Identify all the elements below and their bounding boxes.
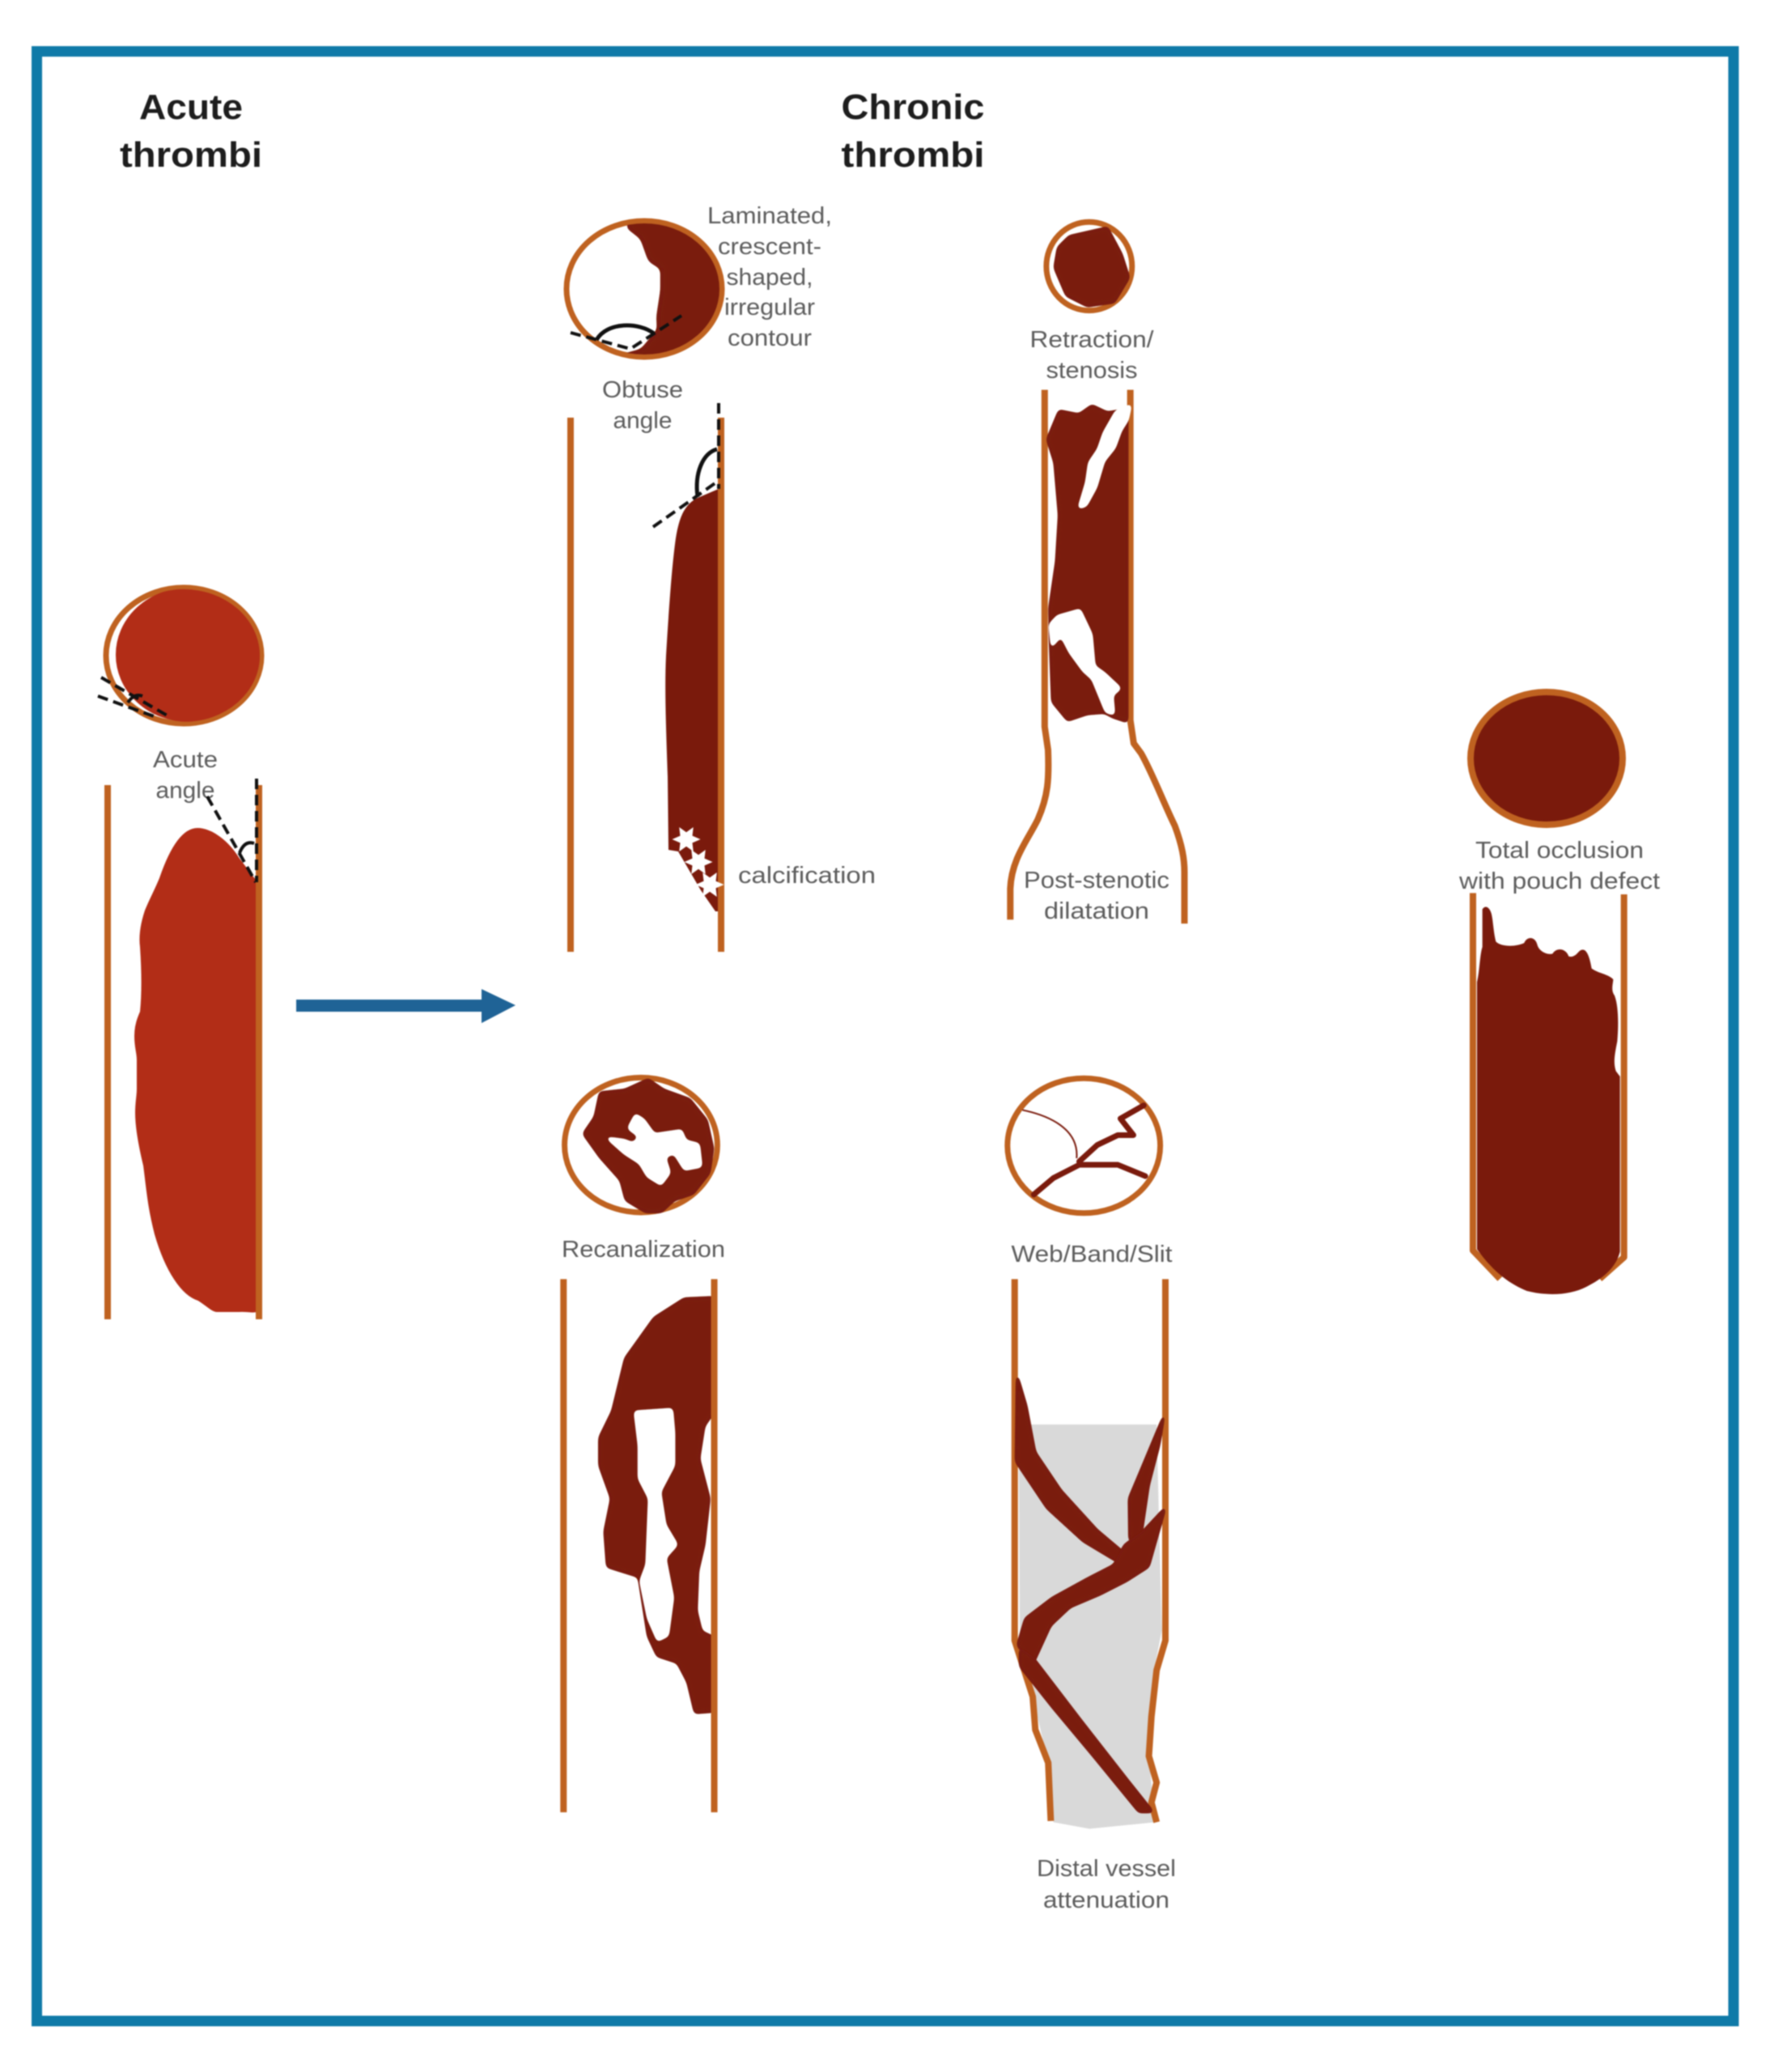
- retraction cross-section: [1046, 222, 1132, 311]
- label: total occlusion with pouch defect: [1458, 838, 1660, 894]
- label: obtuse angle: [602, 377, 683, 434]
- label: distal vessel attenuation: Distal vessel: [1037, 1856, 1176, 1882]
- occlusion cross-section: [1471, 692, 1623, 825]
- laminated cross-section: [563, 217, 725, 361]
- label: post-stenotic dilatation: dilatation: [1044, 898, 1149, 924]
- label: total occlusion with pouch defect: with pouch defect: [1458, 868, 1660, 894]
- panel: acute thrombus: [98, 588, 261, 1319]
- label: laminated crescent-shaped: Laminated,: [707, 203, 832, 229]
- panel: recanalization: [563, 1077, 717, 1812]
- heading: chronic thrombi: [842, 87, 984, 175]
- label: laminated crescent-shaped: [707, 203, 832, 351]
- heading: acute thrombi: thrombi: [120, 135, 262, 175]
- label: calcification: calcification: [738, 863, 876, 889]
- arrow: acute to chronic: [296, 989, 516, 1023]
- web cross-section: [1008, 1078, 1161, 1213]
- attenuated vessel with bands: [1015, 1279, 1165, 1829]
- panel: laminated crescent thrombus: [567, 203, 876, 952]
- occlusion vessel with pouch defect: [1473, 893, 1624, 1294]
- label: obtuse angle: angle: [613, 408, 672, 434]
- label: laminated crescent-shaped: shaped,: [727, 265, 813, 291]
- acute vessel longitudinal: [108, 779, 259, 1319]
- calcification stars: [672, 827, 724, 897]
- heading: acute thrombi: Acute: [139, 87, 243, 127]
- label: web/band/slit: Web/Band/Slit: [1012, 1242, 1172, 1267]
- label: acute angle: [153, 747, 218, 804]
- label: distal vessel attenuation: [1037, 1856, 1176, 1913]
- recanalization cross-section: [565, 1077, 717, 1212]
- heading: acute thrombi: [120, 87, 262, 175]
- panel: total occlusion: [1458, 692, 1660, 1294]
- label: acute angle: angle: [155, 778, 215, 804]
- label: retraction/stenosis: Retraction/: [1029, 327, 1155, 353]
- label: total occlusion with pouch defect: Total occlusion: [1475, 838, 1644, 864]
- label: laminated crescent-shaped: contour: [728, 325, 812, 351]
- label: post-stenotic dilatation: [1024, 868, 1169, 924]
- label: post-stenotic dilatation: Post-stenotic: [1024, 868, 1169, 894]
- label: distal vessel attenuation: attenuation: [1043, 1887, 1169, 1913]
- label: recanalization: Recanalization: [562, 1237, 725, 1263]
- label: acute angle: Acute: [153, 747, 218, 773]
- label: retraction/stenosis: [1029, 327, 1155, 384]
- heading: chronic thrombi: Chronic: [842, 87, 984, 127]
- heading: chronic thrombi: thrombi: [842, 135, 984, 175]
- label: laminated crescent-shaped: irregular: [724, 295, 815, 321]
- panel: web band slit: [1008, 1078, 1165, 1829]
- recanalization vessel: [563, 1279, 715, 1812]
- label: retraction/stenosis: stenosis: [1046, 358, 1138, 384]
- label: obtuse angle: Obtuse: [602, 377, 683, 403]
- vessel with post-stenotic dilatation: [1010, 390, 1185, 923]
- chronic vessel with mural thrombus: [571, 403, 724, 952]
- acute cross-section: [98, 588, 261, 724]
- label: laminated crescent-shaped: crescent-: [718, 234, 821, 260]
- panel: retraction stenosis: [1010, 222, 1185, 923]
